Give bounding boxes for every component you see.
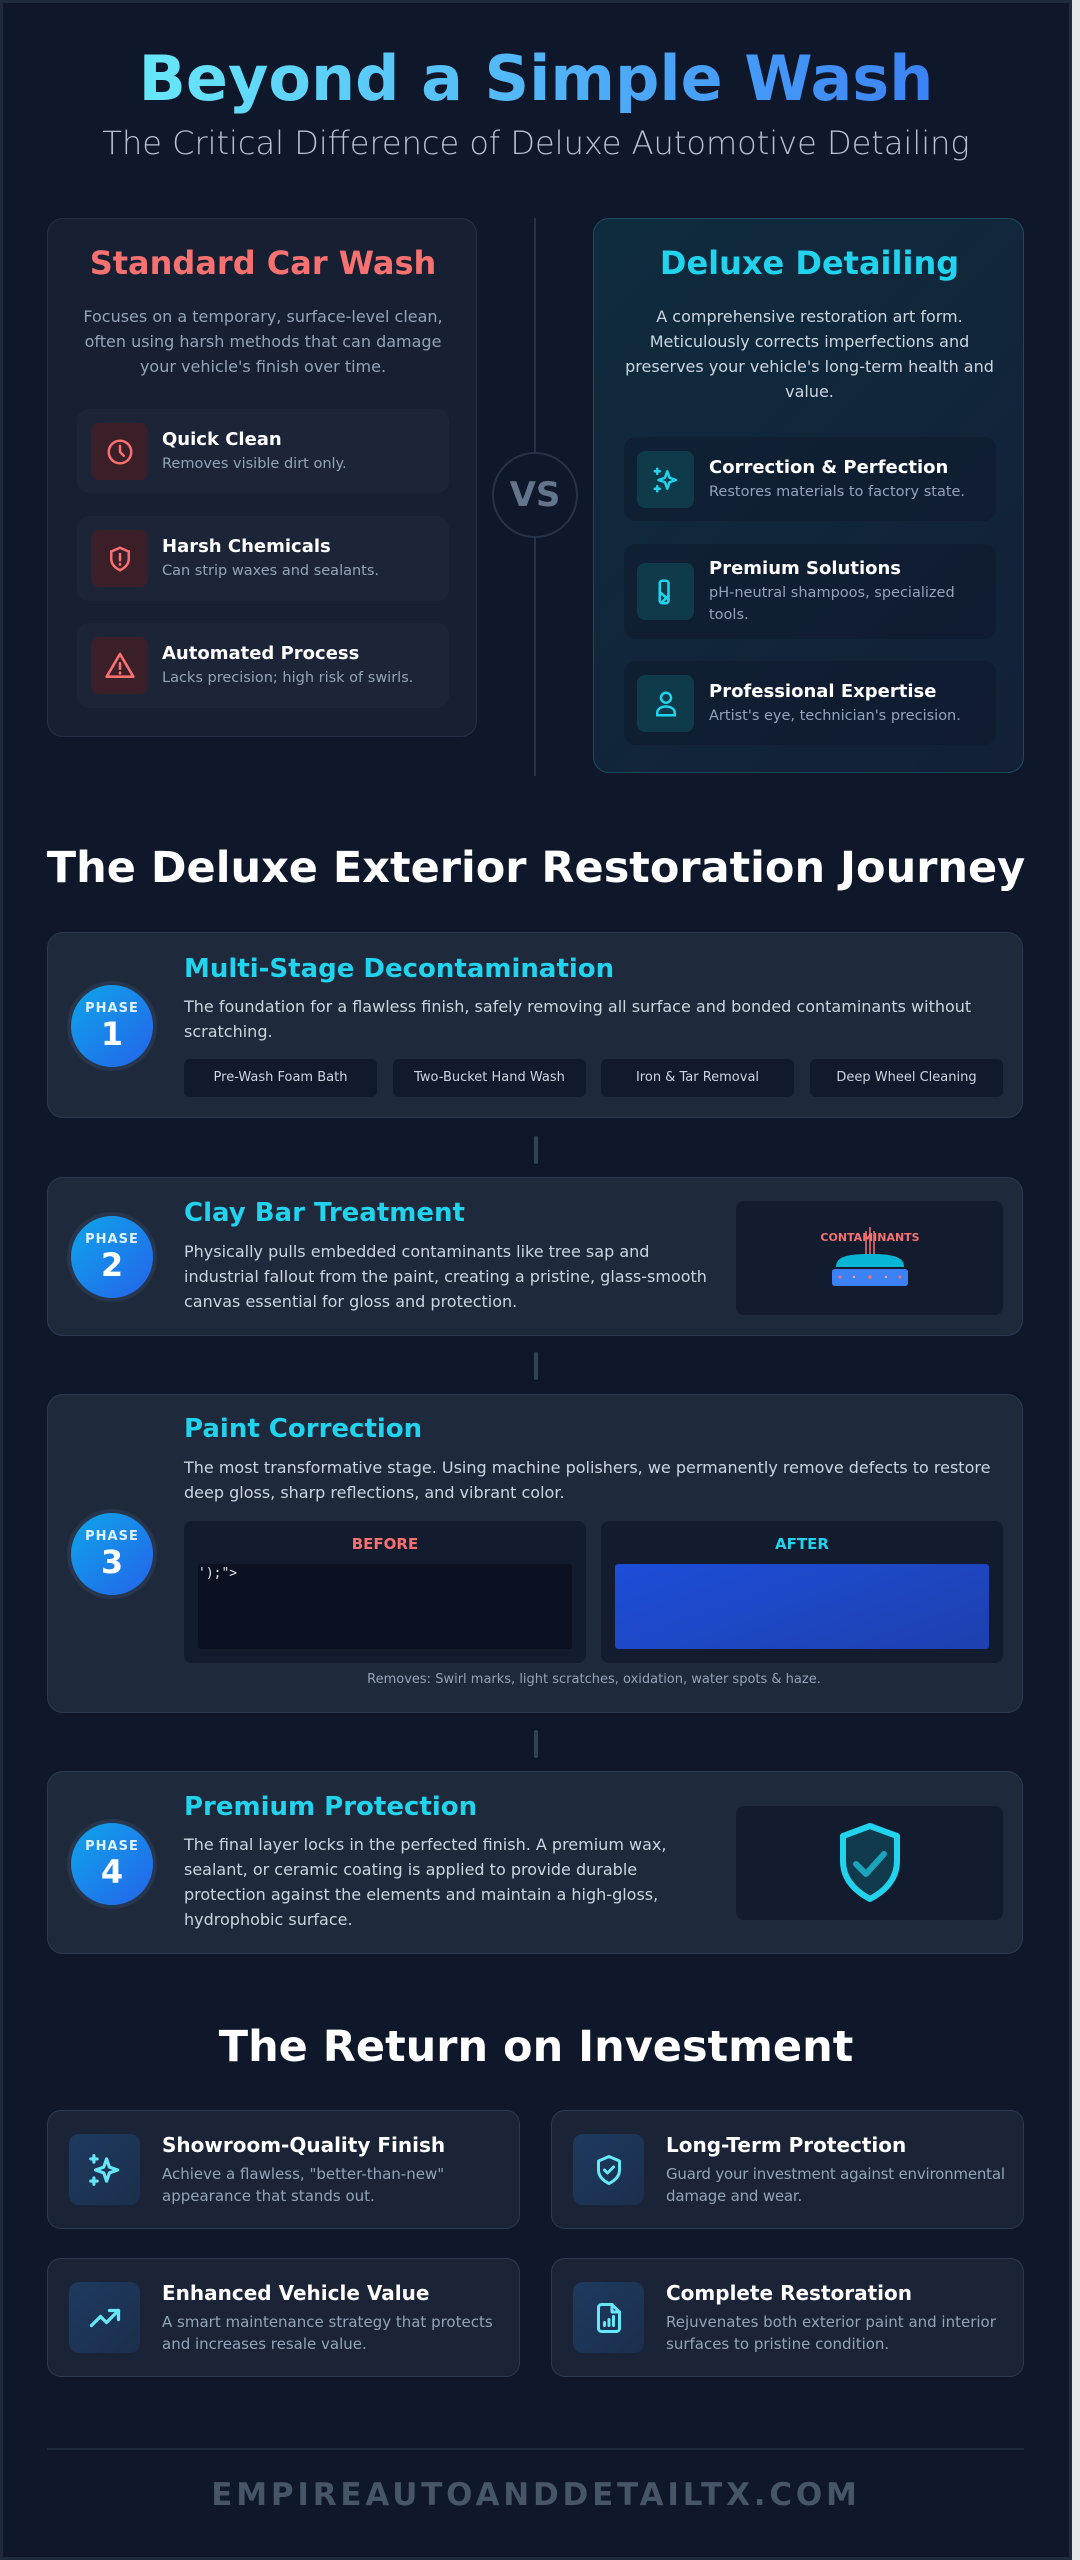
heading: deluxe: Deluxe Detailing (660, 244, 959, 282)
heading: standard: Standard Car Wash (90, 244, 436, 282)
icon: person (637, 675, 694, 732)
card: complete restoration: Complete Restoration (666, 2281, 912, 2305)
icon: warning (91, 637, 148, 694)
item: quick clean (77, 409, 449, 493)
panel: phase 2 (47, 1177, 1023, 1336)
panel: phase 1 (47, 932, 1023, 1118)
card: showroom finish: Achieve a flawless, "better-than-new" appearance that stands out. (162, 2165, 444, 2205)
illustration: clay bar (736, 1201, 1003, 1315)
icon: shield check (573, 2134, 644, 2205)
item: automated process: Automated Process (162, 643, 359, 664)
card: showroom finish (47, 2110, 520, 2229)
item: quick clean: Quick Clean (162, 429, 282, 450)
item: harsh chemicals: Can strip waxes and sealants. (162, 563, 379, 579)
arrow: connector 2 (534, 1352, 538, 1380)
heading: phase 2: Clay Bar Treatment (184, 1198, 465, 1228)
icon: sparkles (637, 451, 694, 508)
item: correction (624, 437, 996, 521)
item: premium solutions: pH-neutral shampoos, specialized tools. (709, 585, 955, 623)
card: complete restoration: Rejuvenates both exterior paint and interior surfaces to pristine condition. (666, 2313, 996, 2353)
card: vehicle value: Enhanced Vehicle Value (162, 2281, 429, 2305)
badge: phase 1: PHASE (85, 1001, 139, 1016)
item: professional expertise: Artist's eye, technician's precision. (709, 708, 961, 724)
panel: deluxe detailing (593, 218, 1024, 773)
icon: clock (91, 423, 148, 480)
tags: Iron & Tar Removal (636, 1070, 759, 1085)
card: vehicle value (47, 2258, 520, 2377)
item: professional expertise: Professional Expertise (709, 681, 936, 702)
tags (184, 1059, 1003, 1097)
card: long-term protection: Guard your investment against environmental damage and wear. (666, 2165, 1005, 2205)
panel: after: AFTER (775, 1535, 829, 1553)
heading: phase 1: Multi-Stage Decontamination (184, 954, 614, 984)
tags: Deep Wheel Cleaning (836, 1070, 977, 1085)
item: harsh chemicals (77, 516, 449, 601)
item: automated process: Lacks precision; high risk of swirls. (162, 670, 413, 686)
arrow: connector 3 (534, 1730, 538, 1758)
item: premium solutions: Premium Solutions (709, 558, 901, 579)
badge: phase 4: PHASE (85, 1839, 139, 1854)
tags: Two-Bucket Hand Wash (414, 1070, 565, 1085)
heading: roi: The Return on Investment (219, 2022, 853, 2072)
title: Beyond a Simple Wash (139, 42, 933, 115)
text: phase 1: The foundation for a flawless finish, safely removing all surface and bonded contaminants without scratching. (184, 997, 971, 1041)
item: automated process (77, 623, 449, 708)
item: harsh chemicals: Harsh Chemicals (162, 536, 331, 557)
card: long-term protection: Long-Term Protection (666, 2133, 906, 2157)
panel: phase 4 (47, 1771, 1023, 1954)
text: standard desc: Focuses on a temporary, surface-level clean, often using harsh methods that can damage your vehicle's finish over time. (83, 307, 443, 376)
badge: phase 3: 3 (101, 1543, 123, 1581)
heading: phase 4: Premium Protection (184, 1792, 477, 1822)
divider line (534, 218, 536, 776)
icon: trend up (69, 2282, 140, 2353)
badge: phase 4: 4 (101, 1853, 123, 1891)
tags: Pre-Wash Foam Bath (214, 1070, 347, 1085)
caption: Removes: Swirl marks, light scratches, oxidation, water spots & haze. (367, 1672, 821, 1687)
badge: phase 2: PHASE (85, 1232, 139, 1247)
panel: before: BEFORE (352, 1535, 418, 1553)
text: phase 4: The final layer locks in the perfected finish. A premium wax, sealant, or ceramic coating is applied to provide durable protection against the elements and maintain a high-gloss, hydrophobic surface. (184, 1835, 666, 1929)
heading: phase 3: Paint Correction (184, 1414, 422, 1444)
subtitle: The Critical Difference of Deluxe Automotive Detailing (102, 124, 970, 162)
illustration: clay bar: CONTAMINANTS (820, 1231, 920, 1244)
item: quick clean: Removes visible dirt only. (162, 456, 347, 472)
badge: phase 2: 2 (101, 1246, 123, 1284)
vs badge: VS (510, 475, 560, 515)
badge: phase 1: 1 (101, 1015, 123, 1053)
item: correction: Correction & Perfection (709, 457, 948, 478)
footer: website: EMPIREAUTOANDDETAILTX.COM (211, 2477, 861, 2513)
heading: journey: The Deluxe Exterior Restoration Journey (47, 843, 1025, 893)
icon: document chart (573, 2282, 644, 2353)
badge: phase 3: PHASE (85, 1529, 139, 1544)
item: premium solutions (624, 544, 996, 639)
card: long-term protection (551, 2110, 1024, 2229)
panel: standard car wash (47, 218, 477, 737)
card: vehicle value: A smart maintenance strategy that protects and increases resale value. (162, 2313, 493, 2353)
item: correction: Restores materials to factory state. (709, 484, 965, 500)
text: phase 2: Physically pulls embedded contaminants like tree sap and industrial fallout from the paint, creating a pristine, glass-smooth canvas essential for gloss and protection. (184, 1242, 707, 1311)
badge: phase 4 (67, 1819, 157, 1909)
vs badge (492, 452, 578, 538)
badge: phase 1 (67, 981, 157, 1071)
text: deluxe desc: A comprehensive restoration art form. Meticulously corrects imperfections and preserves your vehicle's long-term health and value. (625, 307, 994, 401)
card: showroom finish: Showroom-Quality Finish (162, 2133, 445, 2157)
icon: shield alert (91, 530, 148, 587)
badge: phase 3 (67, 1509, 157, 1599)
panel: after (601, 1521, 1003, 1663)
panel: before: ');"> (198, 1566, 237, 1581)
card: complete restoration (551, 2258, 1024, 2377)
footer divider (47, 2448, 1024, 2450)
panel: phase 3 (47, 1394, 1023, 1713)
icon: shield check (736, 1806, 1003, 1920)
panel: before (184, 1521, 586, 1663)
arrow: connector 1 (534, 1136, 538, 1164)
icon: spray bottle (637, 563, 694, 620)
item: professional expertise (624, 661, 996, 745)
badge: phase 2 (67, 1212, 157, 1302)
icon: sparkles (69, 2134, 140, 2205)
text: phase 3: The most transformative stage. Using machine polishers, we permanently remove defects to restore deep gloss, sharp reflections, and vibrant color. (184, 1458, 990, 1502)
